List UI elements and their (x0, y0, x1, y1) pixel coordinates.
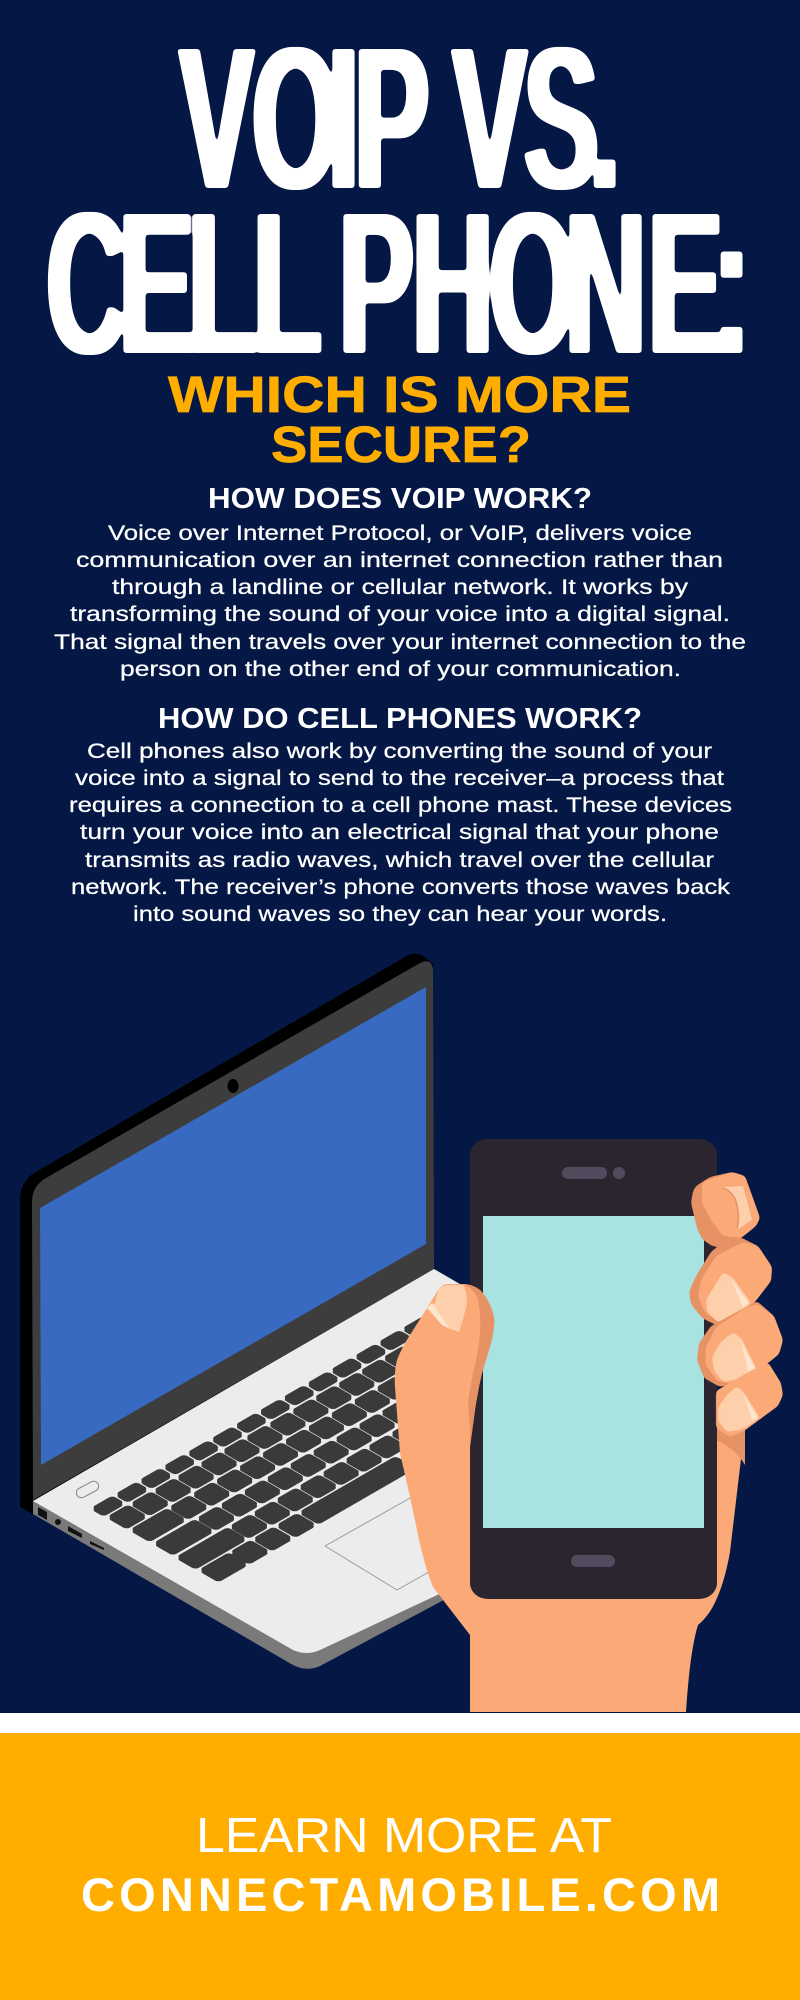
section: how do cell phones work (69, 703, 732, 926)
finger 2 (689, 1237, 772, 1327)
heading: how do cell phones work: HOW DO CELL PHONES WORK? (158, 703, 642, 735)
text block: VoIP explanation: through a landline or cellular network. It works by (112, 575, 688, 599)
laptop bezel (32, 961, 434, 1500)
key tops (92, 1316, 549, 1580)
webcam (228, 1079, 238, 1093)
text block: VoIP explanation: transforming the sound of your voice into a digital signal. (70, 602, 730, 626)
trackpad (325, 1497, 484, 1590)
keyboard (92, 1316, 549, 1583)
text block: cell phone explanation: Cell phones also work by converting the sound of your (87, 739, 712, 763)
phone body (470, 1139, 717, 1599)
text block: cell phone explanation (69, 739, 732, 926)
subtitle: WHICH IS MORE (168, 366, 631, 423)
thumb shadow (463, 1284, 494, 1447)
text block: VoIP explanation: That signal then travels over your internet connection to the (54, 630, 746, 654)
footer panel (0, 1733, 800, 2000)
text block: cell phone explanation: into sound waves so they can hear your words. (133, 902, 667, 926)
palm and wrist (470, 1425, 745, 1712)
thumb and hand left side (395, 1284, 494, 1712)
text block: cell phone explanation: transmits as radio waves, which travel over the cellular (85, 848, 714, 872)
finger 1 (691, 1172, 760, 1248)
finger 3 (697, 1301, 783, 1387)
title: VOIP VS. (179, 4, 620, 234)
phone home button (571, 1555, 615, 1567)
thumb nail highlight (427, 1303, 450, 1329)
palm shadow (717, 1425, 745, 1465)
laptop rim (33, 1500, 500, 1669)
illustration: hand holding phone (395, 1139, 783, 1712)
subtitle (168, 366, 631, 473)
text block: cell phone explanation: voice into a signal to send to the receiver–a process that (75, 766, 724, 790)
text block: VoIP explanation: Voice over Internet Protocol, or VoIP, delivers voice (108, 521, 692, 545)
laptop base (33, 1269, 640, 1653)
phone speaker (562, 1167, 607, 1179)
laptop lid back edge (20, 954, 433, 1514)
title (46, 4, 750, 399)
power button (75, 1479, 100, 1500)
section: how does VoIP work (54, 483, 746, 681)
thumb nail (427, 1285, 467, 1332)
call to action: LEARN MORE AT (196, 1809, 612, 1863)
finger 4 (716, 1362, 783, 1437)
website: CONNECTAMOBILE.COM (81, 1868, 720, 1921)
title: CELL PHONE: (46, 169, 750, 399)
text block: VoIP explanation (54, 521, 746, 681)
heading: how does VoIP work: HOW DOES VOIP WORK? (208, 483, 592, 515)
ports (38, 1507, 104, 1550)
laptop screen (40, 987, 426, 1465)
illustration: laptop (20, 954, 640, 1669)
text block: cell phone explanation: turn your voice into an electrical signal that your phone (80, 820, 719, 844)
phone screen (483, 1216, 704, 1528)
phone camera (613, 1167, 625, 1179)
text block: cell phone explanation: requires a connection to a cell phone mast. These devices (69, 793, 732, 817)
text block: VoIP explanation: person on the other end of your communication. (120, 657, 681, 681)
subtitle: SECURE? (271, 416, 531, 473)
divider band (0, 1713, 800, 1733)
text block: cell phone explanation: network. The receiver’s phone converts those waves back (71, 875, 730, 899)
key shadows (92, 1318, 549, 1583)
text block: VoIP explanation: communication over an internet connection rather than (76, 548, 723, 572)
